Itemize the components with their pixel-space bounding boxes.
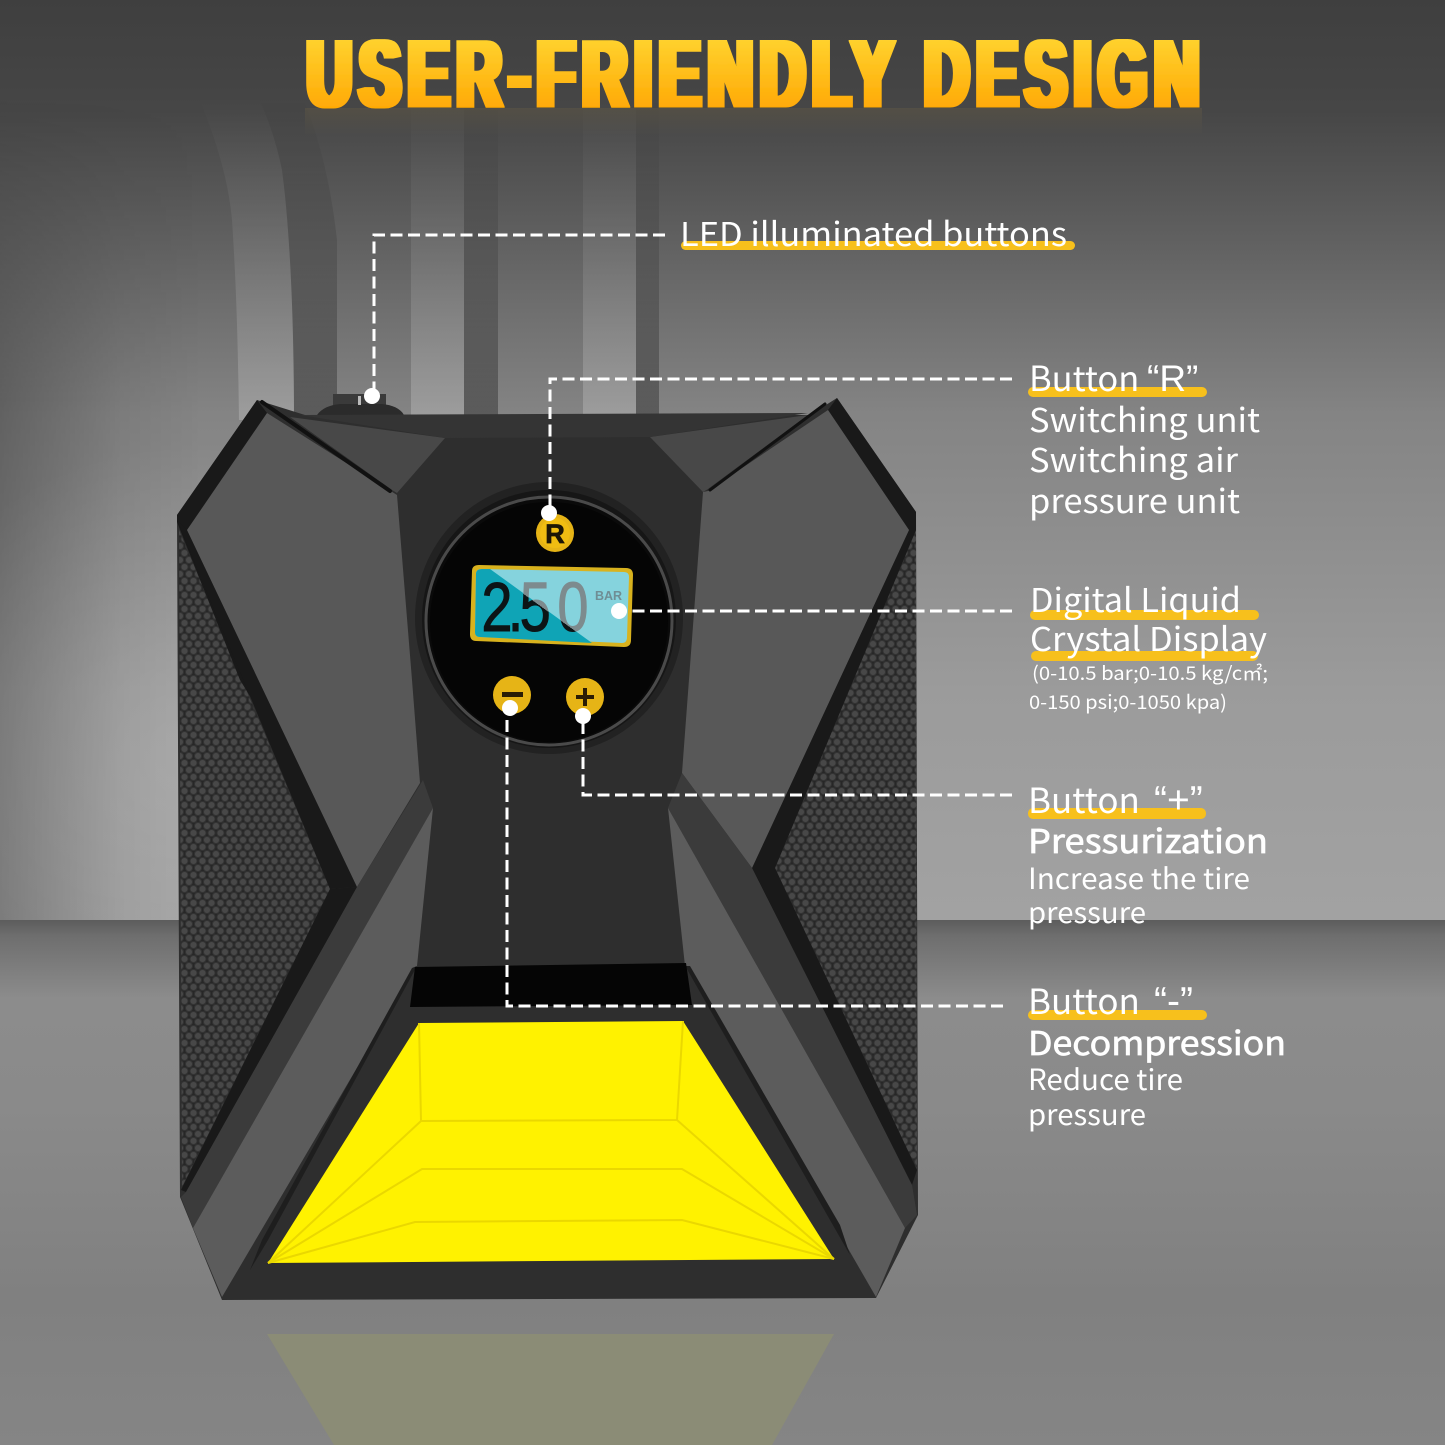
upper side panels — [187, 413, 420, 887]
label: Button R: Switching air — [1029, 434, 1238, 482]
button minus — [493, 676, 531, 714]
LCD screen — [470, 565, 633, 647]
device body silhouette — [177, 398, 918, 1300]
callout leader lines — [374, 235, 1012, 1006]
black trim bands — [177, 398, 917, 1192]
black vent slot — [410, 963, 692, 1007]
hose connector knob — [317, 394, 404, 415]
button plus — [566, 678, 604, 716]
label: Button plus: pressure — [1028, 890, 1146, 932]
label: Digital Liquid Crystal Display — [1029, 574, 1268, 715]
recess shadow edges — [250, 966, 417, 1270]
top bevel faces — [290, 417, 445, 493]
label: Button R: “R” — [1147, 358, 1198, 399]
label: Button minus: pressure — [1028, 1092, 1146, 1134]
title reflection — [305, 108, 1202, 135]
LCD reading: 2.50 — [481, 569, 589, 646]
label: Button minus: Decompression — [1028, 1017, 1286, 1065]
lower light panels — [193, 808, 433, 1297]
right speaker mesh — [775, 530, 917, 1170]
product reflection on floor — [267, 1334, 834, 1445]
label: Button plus — [1028, 773, 1268, 932]
label: Button R — [1028, 351, 1260, 523]
case slits — [262, 402, 825, 491]
display bezel — [415, 482, 683, 754]
yellow front panel — [268, 1021, 834, 1263]
label: Button minus: Button — [1028, 974, 1140, 1025]
label: Button minus — [1028, 974, 1286, 1134]
label: Button minus: Reduce tire — [1028, 1057, 1183, 1099]
label: Button plus: Pressurization — [1028, 815, 1268, 863]
button R — [536, 514, 574, 552]
left speaker mesh — [179, 530, 330, 1187]
diagonal dark strips — [181, 780, 433, 1228]
label: Button plus: Button — [1028, 773, 1140, 824]
label: Button R: pressure unit — [1029, 475, 1240, 523]
label: Button plus: Increase the tire — [1028, 856, 1250, 898]
label: Digital Liquid Crystal Display: 0-150 psi;0-1050 kpa) — [1029, 688, 1227, 715]
label: LED illuminated buttons: LED illuminated buttons — [680, 208, 1067, 256]
label: Button R: Button — [1029, 351, 1139, 401]
label: Digital Liquid Crystal Display: Crystal Display — [1030, 613, 1267, 661]
title: USER-FRIENDLY DESIGN — [307, 20, 1199, 128]
label: Digital Liquid Crystal Display: (0-10.5 bar;0-10.5 kg/c㎡; — [1032, 659, 1268, 686]
label: Button plus: “+” — [1154, 779, 1203, 822]
air pump device — [177, 394, 918, 1300]
LCD unit: BAR — [595, 589, 622, 603]
button R: R — [545, 519, 565, 549]
label: Button R: Switching unit — [1029, 394, 1260, 442]
label: Digital Liquid Crystal Display: Digital Liquid — [1030, 574, 1241, 622]
callout anchor dots — [364, 388, 627, 724]
label: Button minus: “-” — [1154, 980, 1193, 1023]
